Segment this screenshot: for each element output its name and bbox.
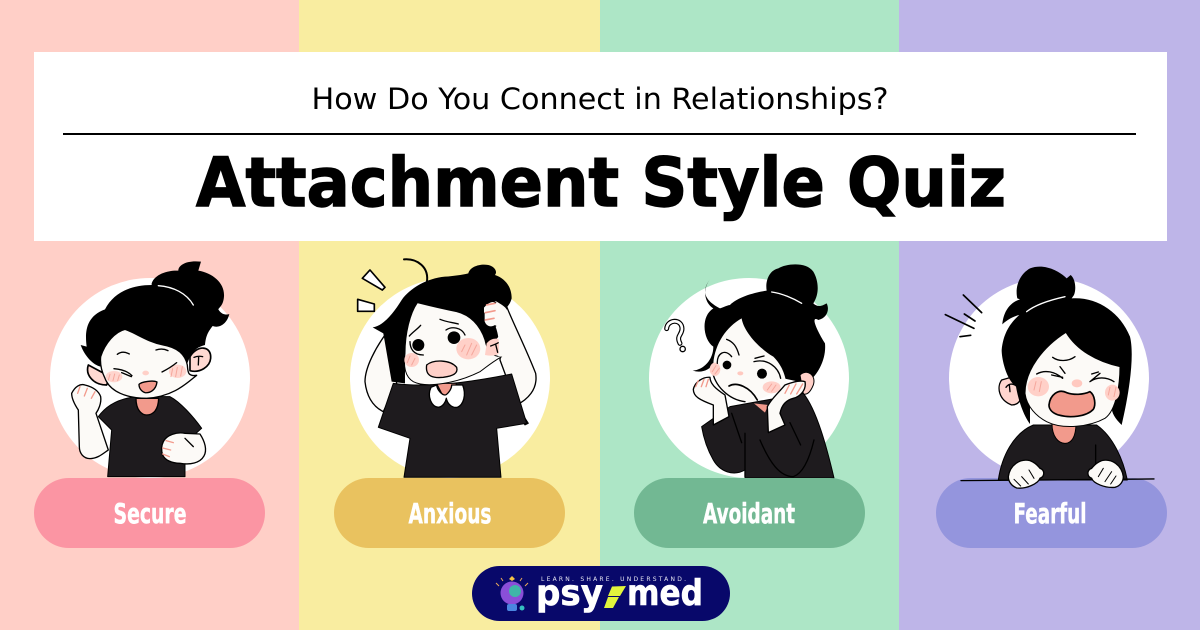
main title: Attachment Style Quiz [196,144,1006,223]
pill: Fearful: Fearful [1014,497,1086,530]
pill: Fearful [936,478,1167,548]
pill: Avoidant: Avoidant [703,497,795,530]
character: secure [72,261,229,477]
character: avoidant [667,264,834,478]
character: fearful [945,267,1154,488]
pill: Secure [34,478,265,548]
white circles [50,278,1149,478]
pill: Anxious [334,478,565,548]
title panel [34,52,1167,241]
tagline: LEARN. SHARE. UNDERSTAND. [541,576,686,583]
pill: Secure: Secure [114,497,186,530]
pill: Anxious: Anxious [408,497,492,530]
logo badge [472,566,730,621]
pill: Avoidant [634,478,865,548]
wordmark: psy [536,573,603,614]
icon: brain lightbulb [496,576,528,611]
character: anxious [358,259,536,477]
logo badge: med [627,573,703,614]
icon: question mark [667,321,685,352]
subtitle: How Do You Connect in Relationships? [312,82,888,116]
